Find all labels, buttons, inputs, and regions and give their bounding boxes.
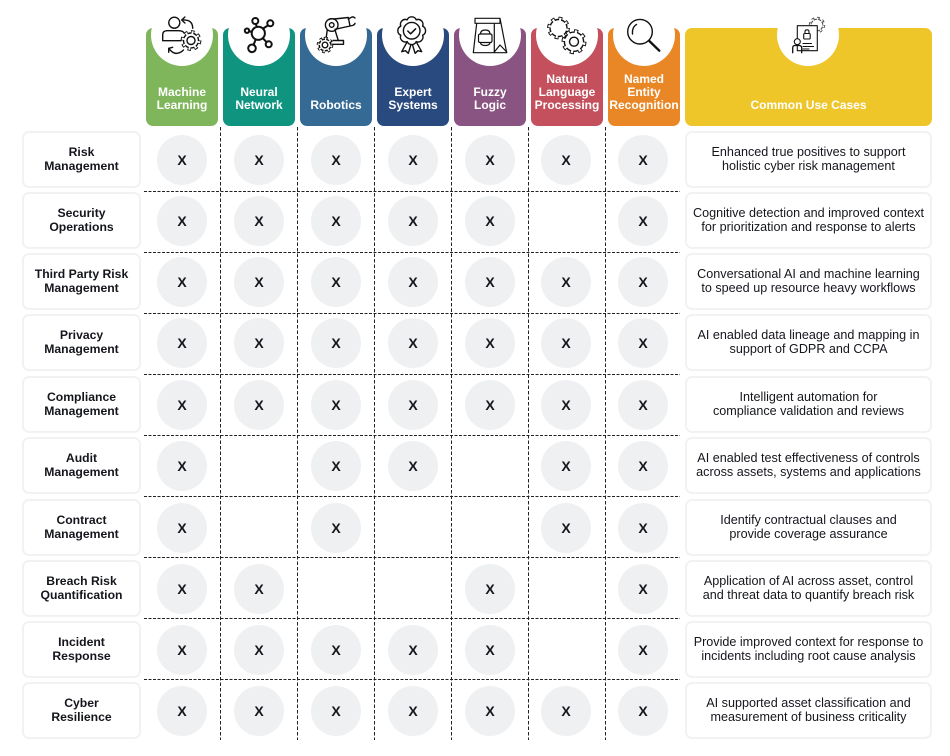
header label: Fuzzy [473,85,507,99]
row label [22,437,141,494]
row label: Resilience [51,710,112,724]
mark: Expert Systems [388,686,438,736]
mark: Fuzzy Logic [465,625,515,675]
mark: Machine Learning [157,257,207,307]
use case text [685,682,932,739]
header label: Neural [240,85,278,99]
header label: Learning [157,98,207,112]
row label: Operations [49,220,114,234]
row label [22,621,141,678]
use case text [685,131,932,188]
header label [473,85,507,112]
use case text: Cognitive detection and improved context [693,206,924,220]
mark: Robotics: X [331,458,341,474]
mark: Robotics: X [331,213,341,229]
mark: Fuzzy Logic [465,564,515,614]
icon: neural network nodes [244,17,274,54]
use case text: incidents including root cause analysis [701,648,916,662]
use case text: Conversational AI and machine learning [697,267,920,281]
mark: Named Entity Recognition [618,380,668,430]
use case text: measurement of business criticality [710,710,906,724]
row label [22,682,141,739]
mark: Machine Learning: X [177,274,187,290]
mark: Named Entity Recognition [618,564,668,614]
mark: Expert Systems: X [408,397,418,413]
use case text: AI enabled test effectiveness of controls [697,451,920,465]
mark: Fuzzy Logic [465,686,515,736]
mark: Neural Network [234,135,284,185]
mark: Named Entity Recognition [618,686,668,736]
use case text [685,621,932,678]
mark: Natural Language Processing [541,257,591,307]
row: Security Operations [22,192,932,249]
mark: Robotics [311,625,361,675]
mark: Neural Network: X [254,335,264,351]
row label: Management [44,342,119,356]
mark: Expert Systems [388,135,438,185]
mark: Named Entity Recognition: X [638,703,648,719]
row label: Management [44,404,119,418]
mark: Named Entity Recognition [618,135,668,185]
column header: Named Entity Recognition [608,18,680,126]
use case text: holistic cyber risk management [722,158,895,172]
mark: Named Entity Recognition [618,196,668,246]
mark: Expert Systems: X [408,642,418,658]
use case text: compliance validation and reviews [713,404,904,418]
use case text [685,314,932,371]
mark: Named Entity Recognition: X [638,274,648,290]
icon: document, person and gear [792,16,826,54]
use case text: and threat data to quantify breach risk [703,588,914,602]
mark: Named Entity Recognition: X [638,520,648,536]
mark: Named Entity Recognition: X [638,335,648,351]
header label: Recognition [609,98,679,112]
row: Contract Management [22,499,932,556]
icon: magnifying glass [627,18,660,52]
header label: Logic [474,98,506,112]
mark: Natural Language Processing [541,686,591,736]
mark: Neural Network: X [254,152,264,168]
mark: Fuzzy Logic: X [485,397,495,413]
mark: Machine Learning [157,564,207,614]
mark: Neural Network: X [254,213,264,229]
mark: Robotics [311,441,361,491]
mark: Expert Systems [388,380,438,430]
use case text [685,376,932,433]
mark: Named Entity Recognition [618,625,668,675]
use case text: provide coverage assurance [729,526,888,540]
row label [22,253,141,310]
mark: Natural Language Processing: X [561,152,571,168]
header label: Entity [627,85,661,99]
header label: Natural [546,72,588,86]
mark: Machine Learning: X [177,703,187,719]
mark: Robotics [311,196,361,246]
use case text [685,499,932,556]
use case text: Identify contractual clauses and [720,513,897,527]
mark: Machine Learning: X [177,642,187,658]
use case text: for prioritization and response to alerts [701,220,916,234]
mark: Machine Learning [157,503,207,553]
mark: Expert Systems [388,318,438,368]
mark: Machine Learning [157,196,207,246]
use case text [685,253,932,310]
mark: Robotics: X [331,703,341,719]
mark: Machine Learning [157,318,207,368]
mark: Machine Learning: X [177,397,187,413]
row: Breach Risk Quantification [22,560,932,617]
mark: Expert Systems: X [408,458,418,474]
mark: Expert Systems: X [408,703,418,719]
mark: Expert Systems: X [408,152,418,168]
row label [22,192,141,249]
mark: Robotics [311,503,361,553]
mark: Expert Systems [388,196,438,246]
header label [609,72,679,112]
mark: Neural Network [234,380,284,430]
row: Audit Management [22,437,932,494]
header label: Network [235,98,283,112]
mark: Named Entity Recognition: X [638,397,648,413]
use case text: Application of AI across asset, control [704,574,913,588]
mark: Named Entity Recognition: X [638,213,648,229]
mark: Machine Learning: X [177,213,187,229]
row label: Response [52,648,111,662]
mark: Fuzzy Logic [465,257,515,307]
mark: Named Entity Recognition: X [638,458,648,474]
row label: Third Party Risk [35,267,128,281]
use case text [685,192,932,249]
mark: Robotics [311,686,361,736]
column header: Neural Network [223,17,295,126]
mark: Fuzzy Logic: X [485,642,495,658]
mark: Named Entity Recognition [618,257,668,307]
row label: Security [57,206,106,220]
mark: Neural Network: X [254,274,264,290]
mark: Machine Learning [157,441,207,491]
header label [535,72,599,112]
use case text: Intelligent automation for [740,390,877,404]
icon: person with gear [162,16,202,54]
mark: Natural Language Processing: X [561,520,571,536]
mark: Natural Language Processing [541,135,591,185]
mark: Natural Language Processing [541,318,591,368]
mark: Natural Language Processing [541,380,591,430]
mark: Natural Language Processing: X [561,335,571,351]
use case text: to speed up resource heavy workflows [701,280,916,294]
row: Privacy Management [22,314,932,371]
mark: Robotics: X [331,397,341,413]
icon: award rosette with check [397,16,426,54]
use case text: Provide improved context for response to [694,635,923,649]
mark: Natural Language Processing: X [561,703,571,719]
mark: Neural Network [234,564,284,614]
row label: Management [44,280,119,294]
mark: Named Entity Recognition [618,318,668,368]
row label: Audit [66,451,97,465]
mark: Expert Systems: X [408,274,418,290]
row: Incident Response [22,621,932,678]
mark: Expert Systems [388,257,438,307]
mark: Fuzzy Logic [465,318,515,368]
mark: Robotics [311,257,361,307]
mark: Fuzzy Logic: X [485,335,495,351]
mark: Neural Network [234,257,284,307]
row label: Contract [56,513,107,527]
mark: Machine Learning: X [177,581,187,597]
row label: Management [44,526,119,540]
mark: Neural Network [234,625,284,675]
header label [235,85,283,112]
header label: Machine [158,85,206,99]
mark: Named Entity Recognition [618,503,668,553]
row: Cyber Resilience [22,682,932,739]
mark: Machine Learning [157,135,207,185]
mark: Neural Network: X [254,703,264,719]
row label: Risk [69,145,94,159]
mark: Fuzzy Logic: X [485,703,495,719]
mark: Robotics: X [331,274,341,290]
mark: Natural Language Processing [541,503,591,553]
column header: Machine Learning [146,16,218,126]
mark: Robotics [311,135,361,185]
mark: Named Entity Recognition: X [638,152,648,168]
mark: Machine Learning [157,625,207,675]
column header: Fuzzy Logic [454,18,526,126]
column header: Common Use Cases [685,16,932,126]
header label: Expert [394,85,432,99]
mark: Fuzzy Logic: X [485,581,495,597]
use case text [685,437,932,494]
mark: Neural Network [234,318,284,368]
row label: Management [44,158,119,172]
header label [388,85,438,112]
mark: Natural Language Processing: X [561,274,571,290]
mark: Named Entity Recognition: X [638,642,648,658]
header label: Robotics [310,98,362,112]
mark: Fuzzy Logic: X [485,152,495,168]
header label: Language [539,85,595,99]
row label: Breach Risk [46,574,117,588]
mark: Fuzzy Logic: X [485,274,495,290]
mark: Machine Learning [157,380,207,430]
row label [22,376,141,433]
use case text: Enhanced true positives to support [712,145,905,159]
mark: Machine Learning: X [177,152,187,168]
header label: Processing [535,98,599,112]
row label [22,499,141,556]
mark: Neural Network [234,196,284,246]
header label: Common Use Cases [750,98,867,112]
icon: two gears [547,16,586,54]
use case text [685,560,932,617]
mark: Robotics [311,318,361,368]
column header: Natural Language Processing [531,16,603,126]
mark: Named Entity Recognition [618,441,668,491]
row: Risk Management [22,131,932,188]
mark: Neural Network: X [254,642,264,658]
row: Compliance Management [22,376,932,433]
header label [157,85,207,112]
row label: Compliance [47,390,116,404]
mark: Neural Network: X [254,581,264,597]
use case text: AI supported asset classification and [706,696,911,710]
mark: Expert Systems [388,625,438,675]
mark: Robotics: X [331,152,341,168]
row label: Quantification [41,588,122,602]
mark: Natural Language Processing [541,441,591,491]
row label [22,131,141,188]
row: Third Party Risk Management [22,253,932,310]
use case text: support of GDPR and CCPA [730,342,887,356]
mark: Expert Systems: X [408,335,418,351]
mark: Neural Network [234,686,284,736]
icon: robot arm with gear [316,16,356,54]
mark: Robotics [311,380,361,430]
row label: Management [44,464,119,478]
mark: Robotics: X [331,520,341,536]
column header: Expert Systems [377,16,449,126]
row label: Cyber [64,696,99,710]
mark: Machine Learning: X [177,335,187,351]
row label: Privacy [60,328,103,342]
mark: Machine Learning: X [177,458,187,474]
row label [22,314,141,371]
mark: Machine Learning: X [177,520,187,536]
header label: Named [624,72,664,86]
use case text: AI enabled data lineage and mapping in [698,328,919,342]
mark: Robotics: X [331,335,341,351]
mark: Natural Language Processing: X [561,397,571,413]
header label: Systems [388,98,438,112]
mark: Fuzzy Logic [465,135,515,185]
icon: paper bag [472,18,508,54]
mark: Fuzzy Logic [465,196,515,246]
mark: Expert Systems [388,441,438,491]
use case text: across assets, systems and applications [696,464,921,478]
mark: Named Entity Recognition: X [638,581,648,597]
column header: Robotics [300,16,372,126]
row label [22,560,141,617]
mark: Neural Network: X [254,397,264,413]
mark: Machine Learning [157,686,207,736]
mark: Expert Systems: X [408,213,418,229]
row label: Incident [58,635,105,649]
mark: Fuzzy Logic: X [485,213,495,229]
mark: Fuzzy Logic [465,380,515,430]
mark: Robotics: X [331,642,341,658]
mark: Natural Language Processing: X [561,458,571,474]
